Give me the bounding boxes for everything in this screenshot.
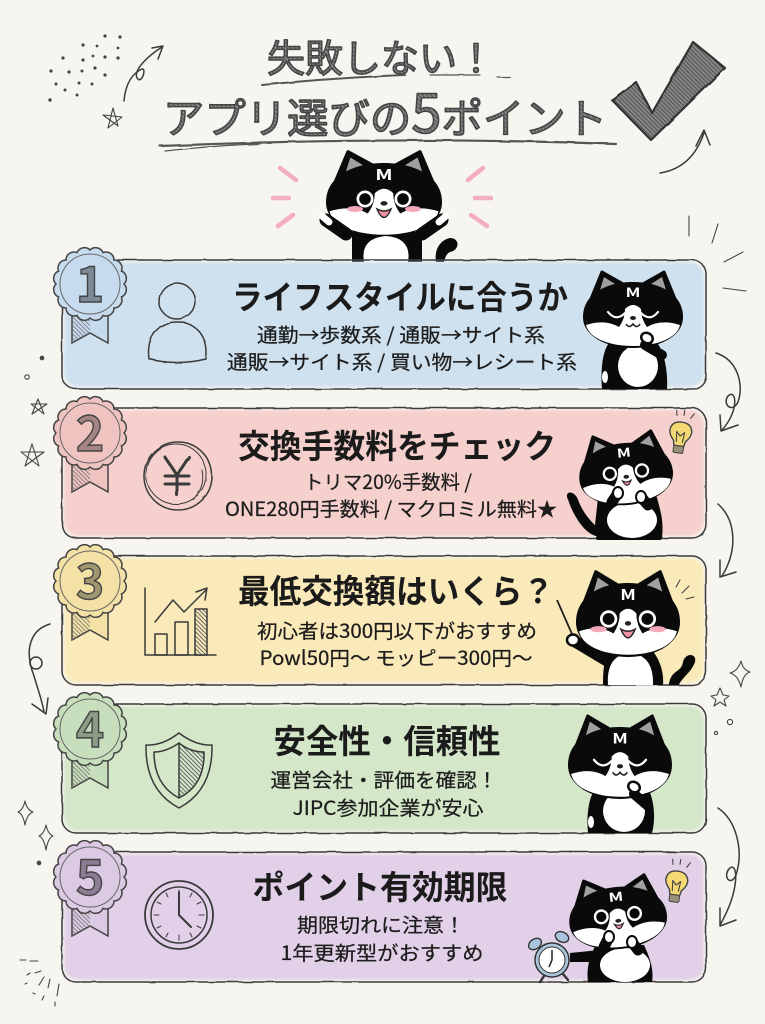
heading: ライフスタイルに合うか xyxy=(232,271,568,319)
icon: growth chart xyxy=(145,588,216,655)
panel 2: fees xyxy=(54,395,706,538)
medal 1 xyxy=(54,246,126,343)
body text: 1年更新型がおすすめ xyxy=(280,937,484,966)
right doodles xyxy=(711,661,750,735)
body text: 初心者は300円以下がおすすめ xyxy=(257,615,537,644)
cat tail xyxy=(436,238,458,262)
icon: light bulb xyxy=(667,409,695,454)
body text: 通勤→歩数系 / 通販→サイト系 xyxy=(257,319,545,348)
title line 1: 失敗しない！ xyxy=(267,28,495,83)
medal 4: 4 xyxy=(76,691,104,761)
panel 4: safety xyxy=(54,691,706,833)
body text xyxy=(225,466,557,522)
body text: 運営会社・評価を確認！ xyxy=(270,764,498,793)
panel border xyxy=(62,260,706,389)
panel 1: lifestyle xyxy=(54,246,706,389)
cat raised arms xyxy=(322,216,446,234)
panel border xyxy=(62,408,706,538)
cat with pointer xyxy=(557,572,694,685)
body text xyxy=(270,764,498,821)
icon: wall clock xyxy=(145,881,213,949)
title xyxy=(160,28,616,151)
panel 5: expiry xyxy=(54,839,706,982)
pink rays xyxy=(273,168,491,226)
top right spark marks xyxy=(689,216,746,291)
left sparkles xyxy=(18,801,53,865)
doodle arrow top left xyxy=(124,46,163,101)
curly arrow 4 to 5 xyxy=(718,808,739,926)
body text: トリマ20%手数料 / xyxy=(304,466,472,495)
cat belly xyxy=(363,236,409,262)
panel border xyxy=(62,556,706,685)
body text: 通販→サイト系 / 買い物→レシート系 xyxy=(227,346,577,375)
left doodle dots xyxy=(25,356,44,379)
icon: person xyxy=(149,283,206,362)
medal 5 xyxy=(54,839,126,936)
doodle star top left xyxy=(103,108,122,128)
title underlines xyxy=(160,75,616,151)
medal 3 xyxy=(54,543,126,640)
medal 1: 1 xyxy=(76,246,104,316)
body text xyxy=(227,319,577,375)
body text: Powl50円～ モッピー300円～ xyxy=(260,642,532,671)
cat thinking xyxy=(568,716,672,833)
icon: shield xyxy=(146,733,212,808)
panel background xyxy=(64,558,704,683)
body text xyxy=(257,615,537,671)
top left dots xyxy=(48,34,122,102)
medal 5: 5 xyxy=(76,839,104,909)
curly arrow 3 to 4 xyxy=(29,624,50,714)
celebrating cat xyxy=(273,152,491,262)
bottom left tick marks xyxy=(20,960,59,1006)
heading: 安全性・信頼性 xyxy=(274,715,500,763)
panel background xyxy=(64,410,704,536)
icon: yen coin xyxy=(144,442,212,510)
body text xyxy=(280,909,484,966)
cat with clock xyxy=(565,873,670,982)
icon: light bulb xyxy=(663,858,691,903)
cat body xyxy=(352,232,422,262)
doodle arrow top right xyxy=(660,130,710,173)
cat thinking xyxy=(583,272,683,389)
heading: ポイント有効期限 xyxy=(252,861,508,909)
icon: large check mark xyxy=(612,42,725,140)
title line 2: アプリ選びの5ポイント xyxy=(163,70,607,149)
icon: alarm clock xyxy=(526,930,570,982)
panel border xyxy=(62,852,706,982)
panel background xyxy=(64,854,704,980)
medal 3: 3 xyxy=(76,543,104,613)
heading: 交換手数料をチェック xyxy=(238,420,556,468)
heading: 最低交換額はいくら？ xyxy=(238,565,554,613)
cat surprised xyxy=(569,429,676,538)
curly arrow 1 to 2 xyxy=(716,353,740,431)
medal 4 xyxy=(54,691,126,788)
panel background xyxy=(64,262,704,387)
left doodle stars xyxy=(21,399,47,466)
curly arrow 2 to 3 xyxy=(718,504,736,577)
panel 3: minimum exchange xyxy=(54,543,706,685)
panel background xyxy=(64,706,704,831)
panel border xyxy=(62,704,706,833)
medal 2: 2 xyxy=(76,395,104,465)
pointer emphasis marks xyxy=(676,580,694,599)
body text: 期限切れに注意！ xyxy=(297,909,465,938)
body text: ONE280円手数料 / マクロミル無料★ xyxy=(225,493,557,522)
medal 2 xyxy=(54,395,126,492)
body text: JIPC参加企業が安心 xyxy=(292,792,484,821)
